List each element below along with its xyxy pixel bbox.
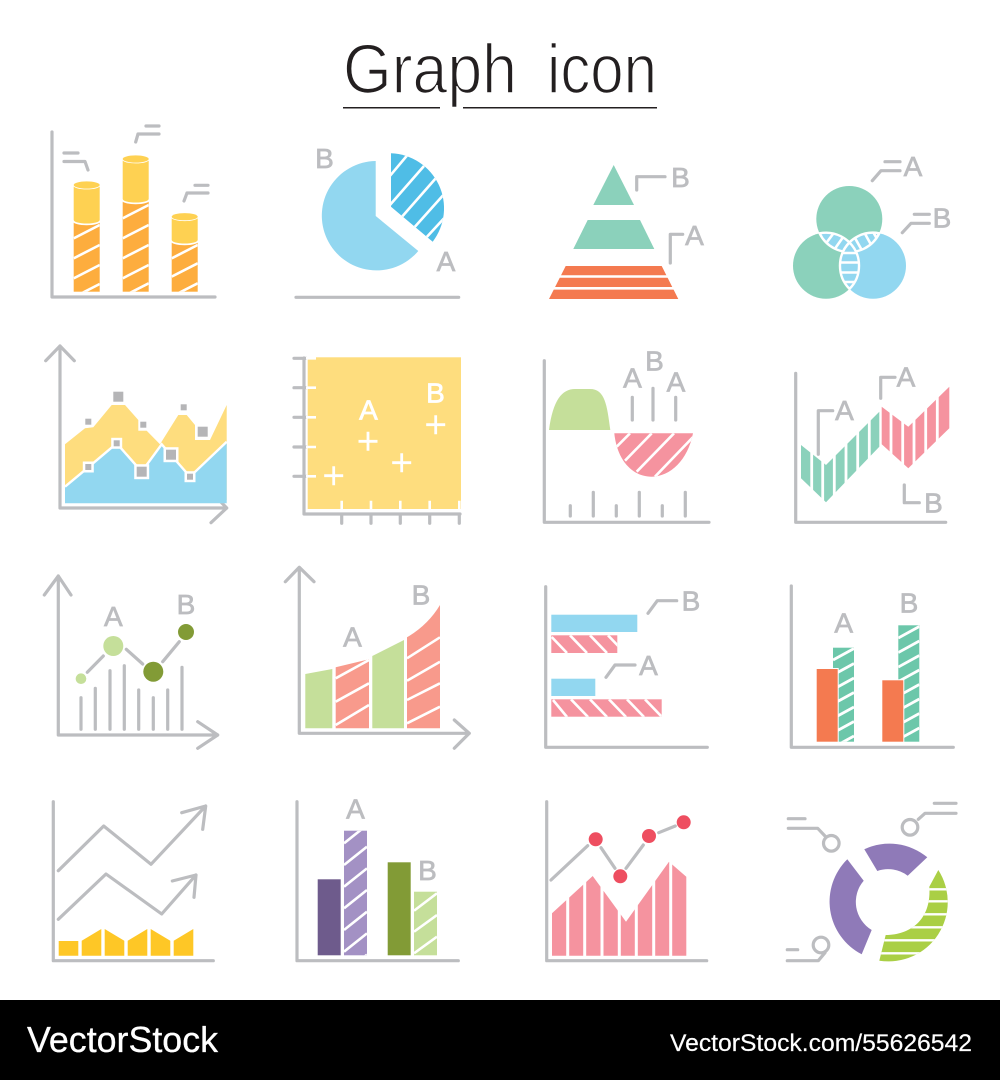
callout lines xyxy=(64,126,208,201)
axes xyxy=(791,586,953,747)
label A: A xyxy=(834,607,853,638)
pink band xyxy=(882,370,949,480)
green striped segment xyxy=(879,870,948,962)
icon: venn diagram xyxy=(793,151,951,299)
plot background xyxy=(308,357,461,509)
lower trend arrow xyxy=(58,874,196,919)
label B: B xyxy=(315,143,334,174)
icon: grouped bars purple and green xyxy=(297,793,458,973)
separator line xyxy=(65,442,227,487)
axes xyxy=(547,802,707,961)
label A: A xyxy=(639,650,658,681)
title: Graph xyxy=(343,30,517,108)
circle top xyxy=(816,186,882,252)
icon: stacked area chart xyxy=(46,346,227,523)
callout bottom left xyxy=(787,937,829,961)
label B: B xyxy=(671,162,690,193)
icon: donut chart xyxy=(787,803,965,961)
axes xyxy=(52,132,215,297)
green column 1 xyxy=(305,669,332,728)
label stems xyxy=(632,388,676,420)
connectors xyxy=(551,826,675,880)
orange bar 2 xyxy=(882,680,903,742)
label A: A xyxy=(104,601,123,632)
teal hatched bar 1 xyxy=(833,648,854,748)
light green hatched bar xyxy=(414,892,437,955)
axes xyxy=(546,587,707,747)
title xyxy=(343,30,657,108)
label A: A xyxy=(359,394,378,425)
callouts xyxy=(872,162,929,233)
pink hatched trough xyxy=(614,433,695,477)
data points xyxy=(324,415,445,485)
label A: A xyxy=(623,362,642,393)
cylinder bar 2 xyxy=(123,155,149,297)
circle left xyxy=(793,233,859,299)
callout top right xyxy=(902,803,956,835)
dark purple bar xyxy=(318,879,341,955)
circle right xyxy=(840,233,906,299)
axes xyxy=(297,802,458,961)
label A: A xyxy=(346,793,365,824)
green bar xyxy=(388,862,411,955)
callouts xyxy=(606,601,677,677)
ticks xyxy=(570,492,685,516)
label B: B xyxy=(177,589,195,620)
green column 2 xyxy=(372,640,404,728)
pyramid base stripes xyxy=(545,266,682,299)
pink column 2 xyxy=(407,605,440,728)
white ticks xyxy=(306,358,459,509)
green band xyxy=(801,405,879,510)
axes and ticks xyxy=(294,358,460,523)
footer brand: VectorStock xyxy=(27,1019,219,1060)
icon: line over pink area xyxy=(547,802,707,961)
callouts xyxy=(818,377,919,503)
label A: A xyxy=(437,246,456,277)
label B: B xyxy=(682,586,700,617)
label A: A xyxy=(904,151,923,182)
upper trend arrow xyxy=(58,806,206,871)
light purple hatched bar xyxy=(344,830,367,956)
axes with arrows xyxy=(285,567,469,748)
footer bar xyxy=(0,1000,1000,1080)
connectors xyxy=(87,642,179,672)
icon: zigzag band chart xyxy=(796,362,949,522)
pink hatched bar 1 xyxy=(551,635,625,653)
yellow area xyxy=(65,405,227,500)
pyramid top xyxy=(593,165,634,205)
lower markers xyxy=(85,440,193,480)
label A: A xyxy=(835,395,854,426)
axes xyxy=(796,373,946,522)
blue bar 1 xyxy=(551,615,637,632)
green hump xyxy=(549,389,610,430)
cylinder bar 3 xyxy=(172,213,198,297)
label A: A xyxy=(667,367,686,398)
cylinder bar 1 xyxy=(74,181,100,297)
axes with arrows xyxy=(44,576,218,748)
blue bar 2 xyxy=(551,679,595,696)
icon: horizontal bars xyxy=(546,586,707,747)
red points xyxy=(589,815,691,883)
icon: scatter plot xyxy=(294,357,461,523)
label B: B xyxy=(924,487,943,518)
footer url: VectorStock.com/55626542 xyxy=(670,1030,972,1057)
callouts xyxy=(637,177,683,263)
label A: A xyxy=(343,622,362,653)
bars xyxy=(81,666,182,729)
upper markers xyxy=(85,392,208,437)
left purple segment xyxy=(830,859,872,954)
label A: A xyxy=(685,220,704,251)
icon: wave chart xyxy=(544,346,709,522)
label B: B xyxy=(426,378,445,409)
overlap top left xyxy=(818,232,850,252)
top purple segment xyxy=(864,844,927,876)
icon: grouped bars orange and teal xyxy=(791,586,953,748)
title: icon xyxy=(547,30,657,108)
axes xyxy=(53,802,213,961)
blue area xyxy=(65,442,227,503)
label A: A xyxy=(897,362,916,393)
label B: B xyxy=(412,579,430,610)
teal hatched bar 2 xyxy=(898,625,919,742)
pyramid middle xyxy=(573,220,654,249)
axes xyxy=(544,361,709,522)
axes with arrows xyxy=(46,346,227,523)
dots xyxy=(76,624,194,684)
label B: B xyxy=(645,346,664,377)
pie hatched slice xyxy=(391,153,444,242)
pink column 1 xyxy=(336,659,369,728)
label B: B xyxy=(933,202,951,233)
orange bar 1 xyxy=(817,669,838,742)
icon: trend arrows over bars xyxy=(53,802,213,961)
pink hatched bar 2 xyxy=(551,699,662,717)
icon: pyramid chart xyxy=(545,162,704,299)
callout top left xyxy=(788,819,839,851)
icon: growth area bars xyxy=(285,567,469,748)
pink area bars xyxy=(552,850,686,956)
label B: B xyxy=(418,855,437,886)
overlap top right xyxy=(842,231,880,252)
label B: B xyxy=(900,587,918,618)
icon: pie chart xyxy=(296,143,459,297)
base line xyxy=(296,296,459,299)
pie large slice xyxy=(322,161,418,270)
icon: cylinder bar chart xyxy=(52,126,215,297)
yellow bars xyxy=(59,929,193,956)
icon: dot line and bars chart xyxy=(44,576,218,748)
overlap bottom xyxy=(838,242,860,290)
